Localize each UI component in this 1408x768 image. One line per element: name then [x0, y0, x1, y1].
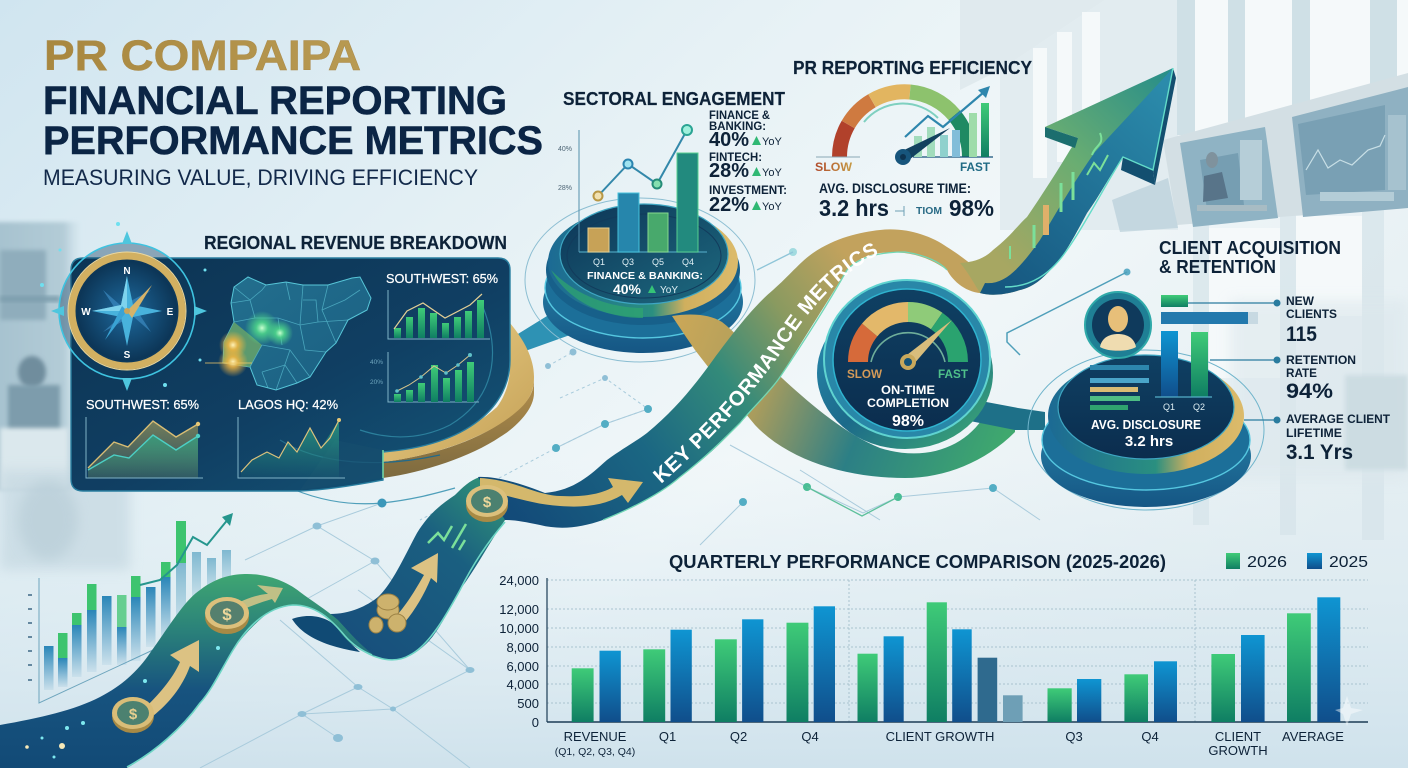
arrow two [240, 585, 283, 610]
gauge: efficiency speedometer: SLOW [815, 162, 852, 174]
icon: compass [40, 222, 207, 391]
sector list: FINANCE & [709, 108, 770, 122]
disc labels [587, 257, 703, 297]
gauge disc: on-time completion: FAST [938, 367, 969, 381]
efficiency stats: AVG. DISCLOSURE TIME: [819, 180, 971, 196]
sector list: 22% [709, 194, 749, 216]
sectoral engagement block [525, 88, 787, 362]
heading: client acquisition: & RETENTION [1159, 257, 1276, 277]
efficiency stats [819, 180, 994, 221]
chart grid and axis: 4,000 [506, 677, 539, 692]
sector list: YoY [762, 136, 782, 148]
chart heading: QUARTERLY PERFORMANCE COMPARISON (2025-2026) [669, 552, 1166, 572]
sector list: YoY [762, 167, 782, 179]
callout: new clients: 115 [1286, 323, 1317, 346]
arrow one [145, 640, 199, 716]
gauge disc: on-time completion: ON-TIME [881, 383, 935, 397]
subtitle: MEASURING VALUE, DRIVING EFFICIENCY [43, 165, 478, 190]
efficiency stats: TIOM [916, 205, 942, 217]
client acquisition block [1028, 238, 1391, 510]
category labels: Q3 [1065, 729, 1083, 744]
bars 2025 [600, 597, 1340, 722]
ribbon: key performance metrics [478, 229, 981, 528]
icon: compass: E [167, 307, 174, 318]
label: southwest top: SOUTHWEST: 65% [386, 271, 498, 286]
coins and arrows on lower ribbon [25, 485, 508, 758]
mini bars in gauge [914, 103, 989, 157]
disc labels: FINANCE & BANKING: [587, 270, 703, 282]
icon: client avatar [1085, 292, 1151, 358]
disc metric [1091, 418, 1201, 450]
sector list: 40% [709, 129, 749, 151]
category labels [555, 729, 1344, 758]
background: wall screen with presenter [1180, 127, 1278, 227]
efficiency stats: 98% [949, 195, 994, 221]
gauge: efficiency speedometer: FAST [960, 162, 990, 174]
background: network grid lines [200, 352, 1040, 768]
category labels: GROWTH [1208, 743, 1268, 758]
disc labels: YoY [660, 285, 678, 296]
gold ring edge of panel [383, 323, 534, 478]
category labels: Q4 [1141, 729, 1159, 744]
chart: sectoral bars and line [558, 125, 707, 252]
disc labels: Q1 [593, 257, 605, 267]
ribbon underside shadow [292, 616, 360, 652]
coin two: $ [222, 605, 232, 624]
chart grid and axis: 6,000 [506, 659, 539, 674]
heading: client acquisition: CLIENT ACQUISITION [1159, 238, 1341, 258]
background: office windows top right [960, 0, 1408, 540]
category labels: CLIENT [1215, 729, 1261, 744]
title block [43, 32, 543, 190]
heading: client acquisition [1159, 238, 1341, 277]
category labels: (Q1, Q2, Q3, Q4) [555, 746, 635, 758]
chart: sectoral bars and line: 40% [558, 146, 572, 153]
chart grid and axis: 8,000 [506, 640, 539, 655]
sparkles [40, 646, 220, 758]
callout: average client lifetime: LIFETIME [1286, 426, 1342, 440]
chart: sectoral bars and line: 28% [558, 185, 572, 192]
client bars: Q1 [1163, 402, 1175, 412]
small green arrows [428, 524, 466, 550]
ribbon segment: rising to key performance band [292, 477, 525, 660]
coin two [205, 597, 249, 634]
disc metric: 3.2 hrs [1125, 433, 1173, 450]
coin stack [369, 594, 406, 633]
background: blurred office on the left [0, 222, 130, 570]
sector list: 28% [709, 160, 749, 182]
gauge disc: on-time completion: 98% [892, 413, 924, 430]
category labels: REVENUE [564, 729, 627, 744]
coin one [112, 697, 154, 733]
legend: 2026 [1247, 554, 1287, 571]
disc labels: 40% [613, 281, 642, 297]
chart grid and axis: 12,000 [499, 602, 539, 617]
callout: average client lifetime: AVERAGE CLIENT [1286, 412, 1391, 426]
category labels: Q2 [730, 729, 747, 744]
sector list [709, 108, 787, 216]
category labels: Q1 [659, 729, 676, 744]
chart grid and axis: 500 [517, 696, 539, 711]
efficiency stats: 3.2 hrs [819, 195, 889, 221]
faded bars [978, 658, 1023, 722]
coin one: $ [129, 706, 138, 723]
arrow three [398, 553, 438, 622]
callout: retention rate [1210, 353, 1356, 403]
label: southwest bottom: SOUTHWEST: 65% [86, 397, 199, 412]
coin three [466, 485, 508, 522]
icon: compass: S [124, 350, 131, 361]
sector list: FINTECH: [709, 150, 762, 164]
callout: retention rate: 94% [1286, 380, 1333, 403]
heading: efficiency: PR REPORTING EFFICIENCY [793, 57, 1033, 78]
callout: new clients [1188, 294, 1337, 346]
arrow candlesticks [1010, 133, 1108, 259]
title: line one: FINANCIAL REPORTING [43, 79, 507, 123]
ribbon segment: rising curve with coins [0, 574, 375, 768]
client bars [1090, 295, 1258, 412]
disc: client [1028, 350, 1264, 510]
callout: average client lifetime [1244, 412, 1391, 464]
title: company name: PR COMPAIPA [44, 32, 361, 80]
callout: new clients: CLIENTS [1286, 307, 1337, 321]
callout: retention rate: RETENTION [1286, 353, 1356, 367]
icon: compass: N [123, 266, 131, 277]
panel: regional revenue breakdown [40, 222, 534, 491]
gauge disc: on-time completion: SLOW [847, 367, 883, 381]
PR reporting efficiency block [793, 57, 1033, 221]
chart grid and axis: 0 [532, 715, 539, 730]
chart: growth bars with axis labels [370, 352, 479, 402]
disc labels: Q5 [652, 257, 664, 267]
gauge disc: on-time completion [817, 280, 993, 449]
chart: lagos area [238, 417, 345, 478]
disc labels: Q4 [682, 257, 694, 267]
back ribbon loop behind gauge [672, 314, 1015, 478]
bars 2026 [572, 602, 1311, 722]
callout: new clients: NEW [1286, 294, 1315, 308]
chart grid and axis: 24,000 [499, 573, 539, 588]
connector: regional panel to sectoral disc [500, 316, 570, 360]
heading: sectoral engagement: SECTORAL ENGAGEMENT [563, 88, 786, 109]
legend: 2025 [1329, 554, 1368, 571]
lower left bar chart [28, 513, 233, 703]
callout: average client lifetime: 3.1 Yrs [1286, 441, 1353, 464]
decorative sparkle [1335, 696, 1363, 726]
gauge disc: on-time completion: COMPLETION [867, 396, 949, 410]
icon: compass: W [81, 307, 91, 318]
gold arrow on ribbon [480, 478, 643, 507]
chart: southwest area [86, 417, 203, 478]
sector list: YoY [762, 201, 782, 213]
chart grid and axis: 10,000 [499, 621, 539, 636]
panel body [71, 258, 510, 491]
category labels: CLIENT GROWTH [886, 729, 994, 744]
coin three: $ [483, 494, 492, 511]
connector: gauge to client disc [965, 398, 1045, 430]
background: wall screen with line chart [1292, 87, 1408, 217]
disc: sectoral [525, 198, 755, 362]
chart: southwest bars [388, 290, 490, 339]
chart grid and axis [499, 573, 1368, 730]
gauge: efficiency speedometer [815, 86, 993, 174]
category labels: AVERAGE [1282, 729, 1344, 744]
disc labels: Q3 [622, 257, 634, 267]
sector list: BANKING: [709, 119, 766, 133]
chart: growth bars with axis labels: 40% [370, 359, 383, 366]
quarterly performance comparison chart [499, 552, 1368, 758]
ribbon label: KEY PERFORMANCE METRICS [652, 243, 878, 484]
sector list: INVESTMENT: [709, 183, 787, 197]
disc metric: AVG. DISCLOSURE [1091, 418, 1201, 432]
callout: retention rate: RATE [1286, 366, 1317, 380]
category labels: Q4 [801, 729, 819, 744]
title: line two: PERFORMANCE METRICS [43, 119, 543, 163]
big arrow [960, 68, 1176, 295]
heading: regional revenue: REGIONAL REVENUE BREAKDOWN [204, 232, 507, 253]
label: lagos hq: LAGOS HQ: 42% [238, 397, 338, 412]
chart: growth bars with axis labels: 20% [370, 379, 383, 386]
map: Nigeria with glowing hubs [205, 277, 371, 390]
legend [1226, 553, 1368, 571]
client bars: Q2 [1193, 402, 1205, 412]
